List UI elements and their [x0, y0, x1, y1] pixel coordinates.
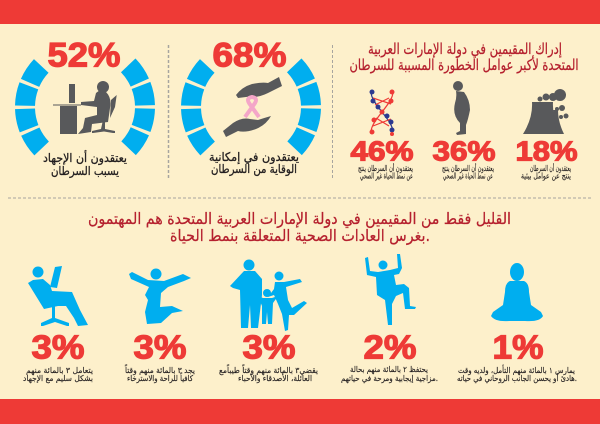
icon: person meditating: [491, 263, 543, 321]
icon: jumping woman: [129, 268, 191, 324]
icon: cheerful dancing man: [365, 254, 416, 325]
heading: healthy habits: القليل فقط من المقيمين في دولة الإمارات العربية المتحدة هم المهتمون: [88, 209, 511, 229]
stat: 18%: يعتقدون أن السرطان: [530, 163, 571, 173]
stat: 36%: يعتقدون أن السرطان ينتج: [442, 163, 494, 173]
stat: 36%: 36%: [432, 136, 496, 166]
stat: 18%: ينتج عن عوامل بيئية: [521, 172, 571, 180]
heading: healthy habits: .بغرس العادات الصحية المتعلقة بنمط الحياة: [170, 226, 430, 246]
stat: 18%: 18%: [516, 136, 578, 166]
stat: 46%: 46%: [350, 136, 414, 166]
caption: يعتقدون أن الإجهاد: [43, 150, 127, 166]
percentage: 1%: 1%: [492, 328, 544, 366]
icon: DNA helix: [370, 90, 394, 136]
percentage: 3%: 3%: [32, 328, 84, 366]
panel: stress management: [23, 266, 93, 384]
caption: يحتفظ ٢ بالمائة منهم بحالة: [350, 365, 428, 374]
caption: يعتقدون في إمكانية: [209, 150, 299, 165]
icon: person working at desk: [53, 81, 117, 134]
caption: يقضي٣ بالمائة منهم وقتاً طيباًمع: [219, 364, 318, 375]
icon: overweight person: [453, 81, 470, 135]
stat: 18%: [516, 136, 578, 180]
icon: person reclining with newspaper: [28, 266, 88, 326]
caption: [23, 366, 93, 384]
segmented ring: [166, 22, 336, 192]
caption: [457, 364, 577, 383]
stat: 46%: عن نمط الحياة غير الصحي: [360, 172, 413, 180]
caption: [341, 365, 438, 384]
caption: بشكل سليم مع الإجهاد: [23, 374, 93, 384]
percentage: 68%: 68%: [212, 36, 286, 74]
segmented ring: [0, 22, 170, 192]
stat: 36%: عن نمط الحياة غير الصحي: [443, 172, 493, 180]
icon: factory cooling towers with smoke: [523, 89, 568, 134]
panel: family time: [219, 260, 318, 383]
icon: family silhouettes: [230, 260, 307, 331]
percentage: 3%: 3%: [134, 328, 186, 366]
top red band: [0, 0, 600, 24]
caption: .مزاجية إيجابية ومرحة في حياتهم: [341, 374, 438, 384]
caption: [219, 364, 318, 383]
caption: كافياً للراحة والاسترخاء: [127, 372, 193, 383]
icon: hands protecting pink ribbon: [223, 77, 282, 137]
panel: risk factors: [350, 40, 578, 180]
caption: يجد ٣ بالمائة منهم وقتاً: [124, 364, 195, 375]
percentage: 2%: 2%: [364, 328, 416, 366]
panel: prevention statistic: [166, 22, 336, 192]
heading: [350, 40, 578, 74]
percentage: 3%: 3%: [242, 328, 296, 366]
percentage: 52%: 52%: [48, 36, 120, 74]
caption: [124, 364, 195, 383]
caption: يتعامل ٣ بالمائة منهم: [26, 366, 93, 375]
heading: healthy habits: [88, 209, 511, 246]
panel: positive mood: [341, 254, 438, 384]
caption: .هادئ أو يحسن الجانب الروحاني في حياته: [457, 373, 577, 383]
stat: 36%: [432, 136, 496, 180]
caption: الوقاية من السرطان: [211, 162, 297, 177]
caption: [43, 150, 127, 179]
caption: العائلة، الأصدقاء والأحباء: [238, 373, 312, 383]
caption: يسبب السرطان: [51, 164, 119, 179]
caption: يمارس ١ بالمائة منهم التأمل، ولديه وقت: [458, 364, 575, 375]
stat: 46%: يعتقدون أن السرطان ينتج: [358, 163, 413, 173]
panel: stress statistic: [0, 22, 170, 192]
panel: meditation: [457, 263, 577, 383]
bottom red band: [0, 399, 600, 424]
caption: [209, 150, 299, 177]
panel: relaxation time: [124, 268, 195, 383]
stat: 46%: [350, 136, 414, 180]
